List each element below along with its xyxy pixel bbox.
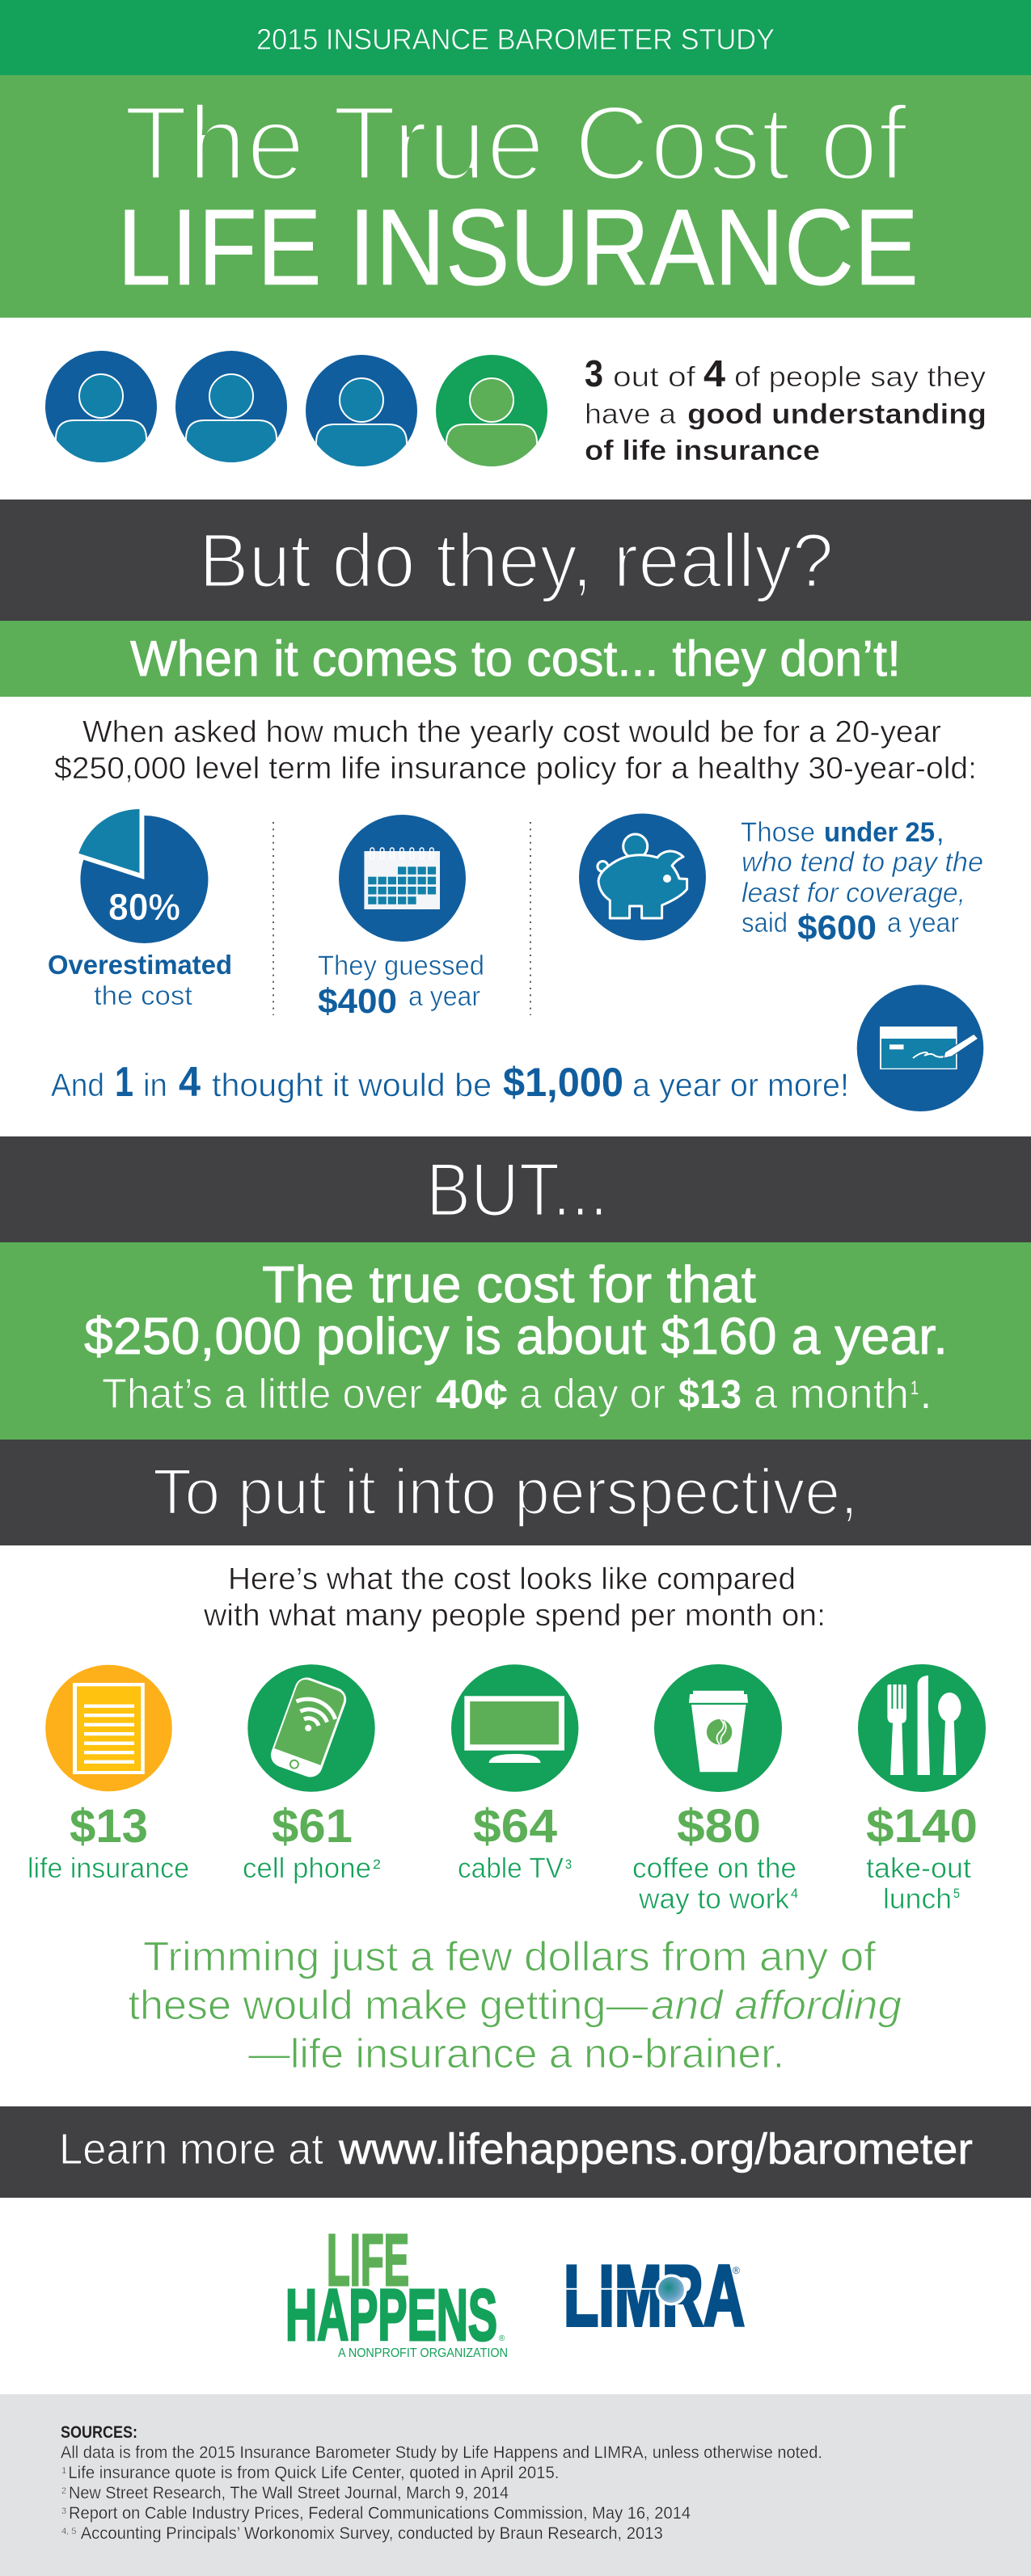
text: those under 25: least for coverage, <box>742 878 966 909</box>
panel: true cost <box>0 1242 1031 1440</box>
text: comparison intro <box>203 1562 826 1633</box>
logo: Life Happens: ® <box>499 2334 505 2343</box>
item: coffee $80: coffee on the <box>632 1853 796 1884</box>
heading: to put it into perspective: To put it into perspective, <box>153 1456 858 1528</box>
text: those under 25: , <box>936 817 944 848</box>
panel: sources: 2 <box>61 2486 66 2496</box>
text: 3 out of 4: 3 <box>585 352 603 394</box>
panel: sources: Life insurance quote is from Quick Life Center, quoted in April 2015. <box>68 2464 559 2482</box>
item: cell phone $61 <box>243 1664 381 1884</box>
panel: people understanding <box>45 351 985 466</box>
panel: sources: All data is from the 2015 Insurance Barometer Study by Life Happens and LIMRA, unless otherwise noted. <box>61 2443 822 2462</box>
logo: LIMRA <box>562 2247 745 2344</box>
logo: Life Happens <box>285 2220 508 2360</box>
heading: BUT...: BUT... <box>426 1147 608 1232</box>
text: they guessed $400: a year <box>408 981 480 1012</box>
text: survey question: When asked how much the yearly cost would be for a 20-year <box>82 715 941 749</box>
text: 3 out of 4 <box>585 352 987 466</box>
panel: true cost: $250,000 policy is about $160 a year. <box>84 1307 948 1365</box>
panel: sources: SOURCES: <box>61 2423 137 2442</box>
text: survey question: $250,000 level term life insurance policy for a healthy 30-year-old: <box>54 752 977 786</box>
text: overestimated the cost: Overestimated <box>48 950 232 980</box>
item: take-out lunch $140: lunch <box>883 1883 952 1915</box>
item: take-out lunch $140: 5 <box>953 1886 960 1901</box>
text: comparison intro: Here’s what the cost looks like compared <box>228 1562 796 1596</box>
text: they guessed $400: $400 <box>318 982 397 1021</box>
text: those under 25: under 25 <box>824 817 935 848</box>
item: take-out lunch $140: take-out <box>866 1853 971 1884</box>
icon: person 2 <box>175 351 287 462</box>
icon: calendar <box>339 815 466 942</box>
panel: sources: 1 <box>61 2466 66 2476</box>
panel: sources: New Street Research, The Wall Street Journal, March 9, 2014 <box>69 2484 509 2502</box>
panel: true cost: 40¢ <box>436 1372 508 1417</box>
pie chart: 80% overestimated: 80% <box>108 886 180 928</box>
top banner: study name <box>0 0 1031 75</box>
panel: sources <box>0 2394 1031 2576</box>
panel: true cost: a month <box>754 1371 909 1418</box>
heading: But do they, really?: But do they, really? <box>199 518 834 604</box>
text: trimming conclusion: —life insurance a no-brainer. <box>248 2030 784 2076</box>
text: those under 25: a year <box>887 908 959 938</box>
icon: fork knife spoon <box>858 1664 986 1792</box>
item: life insurance $13 <box>27 1665 189 1884</box>
text: those under 25: Those <box>741 817 815 848</box>
text: overestimated the cost <box>48 950 232 1010</box>
item: life insurance $13: $13 <box>70 1800 148 1853</box>
logo: Life Happens: A NONPROFIT ORGANIZATION <box>338 2346 508 2360</box>
panel: true cost: . <box>920 1372 932 1417</box>
text: 3 out of 4: of life insurance <box>585 435 820 466</box>
panel: sources: Report on Cable Industry Prices, Federal Communications Commission, May 16, 2014 <box>69 2504 691 2523</box>
panel: true cost: $13 <box>678 1372 742 1417</box>
icon: person 1 <box>45 351 157 462</box>
title panel: The True Cost of <box>124 83 908 202</box>
text: those under 25 <box>741 817 983 947</box>
text: 1 in 4 thought $1,000 <box>51 1059 849 1106</box>
heading: BUT... <box>0 1136 1031 1242</box>
text: 1 in 4 thought $1,000: a year or more! <box>632 1068 849 1103</box>
text: survey question <box>54 715 977 786</box>
text: those under 25: who tend to pay the <box>742 847 983 878</box>
item: coffee $80: $80 <box>677 1800 761 1853</box>
title panel: LIFE INSURANCE <box>117 188 919 308</box>
heading: when it comes to cost <box>0 621 1031 697</box>
text: 1 in 4 thought $1,000: 4 <box>179 1059 201 1106</box>
logo: Life Happens: HAPPENS <box>285 2275 497 2356</box>
item: cable TV $64: 3 <box>565 1857 572 1872</box>
icon: television <box>451 1664 578 1792</box>
panel: true cost: a day or <box>519 1371 666 1418</box>
item: cell phone $61: $61 <box>272 1800 353 1853</box>
text: 3 out of 4: of people say they <box>734 361 987 393</box>
text: 1 in 4 thought $1,000: And <box>51 1068 104 1103</box>
panel: true cost: 1 <box>911 1377 919 1399</box>
icon: smartphone <box>247 1664 375 1792</box>
text: trimming conclusion <box>128 1933 902 2076</box>
heading: But do they, really? <box>0 500 1031 621</box>
text: trimming conclusion: Trimming just a few dollars from any of <box>143 1933 877 1979</box>
icon: piggy bank <box>579 813 706 941</box>
pie chart: 80% overestimated <box>78 809 208 943</box>
title panel <box>0 75 1031 318</box>
item: take-out lunch $140: $140 <box>866 1800 978 1853</box>
text: 1 in 4 thought $1,000: 1 <box>115 1059 133 1106</box>
item: coffee $80: 4 <box>791 1886 798 1901</box>
top banner: study name: 2015 INSURANCE BAROMETER STUDY <box>256 23 775 56</box>
call to action: learn more: www.lifehappens.org/barometer <box>338 2125 973 2173</box>
icon: person 4 green <box>436 355 547 466</box>
item: coffee $80 <box>632 1664 798 1915</box>
icon: check <box>857 984 983 1111</box>
text: they guessed $400: They guessed <box>318 951 484 981</box>
item: cable TV $64 <box>451 1664 578 1884</box>
item: cell phone $61: 2 <box>373 1857 381 1872</box>
text: those under 25: $600 <box>797 909 877 947</box>
item: cable TV $64: $64 <box>473 1800 557 1853</box>
icon: person 3 <box>306 355 417 466</box>
text: 1 in 4 thought $1,000: thought it would be <box>212 1068 492 1103</box>
text: comparison intro: with what many people spend per month on: <box>203 1599 826 1633</box>
item: cable TV $64: cable TV <box>458 1853 564 1884</box>
text: overestimated the cost: the cost <box>94 980 192 1010</box>
heading: to put it into perspective <box>0 1440 1031 1545</box>
panel: sources: 3 <box>61 2506 66 2516</box>
logo: Life Happens: LIFE <box>327 2220 409 2301</box>
item: coffee $80: way to work <box>638 1883 789 1915</box>
item: take-out lunch $140 <box>858 1664 986 1915</box>
call to action: learn more <box>0 2106 1031 2198</box>
text: trimming conclusion: and affording <box>651 1982 902 2028</box>
panel: sources: 4, 5 <box>61 2527 76 2536</box>
text: 3 out of 4: 4 <box>704 352 725 394</box>
text: 3 out of 4: have a <box>585 398 677 430</box>
panel: sources: Accounting Principals’ Workonomix Survey, conducted by Braun Research, 2013 <box>81 2524 663 2543</box>
heading: when it comes to cost: When it comes to cost... they don’t! <box>130 631 901 687</box>
call to action: learn more: Learn more at <box>59 2125 323 2173</box>
text: they guessed $400 <box>318 951 484 1021</box>
icon: coffee cup <box>654 1664 782 1792</box>
panel: true cost: The true cost for that <box>262 1255 756 1313</box>
logo: LIMRA: LIMRA <box>564 2247 745 2344</box>
text: 1 in 4 thought $1,000: $1,000 <box>503 1060 623 1105</box>
item: life insurance $13: life insurance <box>27 1853 189 1884</box>
icon: document <box>45 1665 172 1791</box>
item: cell phone $61: cell phone <box>243 1853 371 1884</box>
text: 3 out of 4: good understanding <box>687 398 987 430</box>
text: 3 out of 4: out of <box>613 361 695 393</box>
text: those under 25: said <box>742 908 788 938</box>
text: trimming conclusion: these would make getting— <box>128 1982 649 2028</box>
panel: true cost: That’s a little over <box>102 1371 422 1418</box>
text: 1 in 4 thought $1,000: in <box>143 1068 167 1103</box>
logo: LIMRA: ® <box>733 2265 740 2276</box>
